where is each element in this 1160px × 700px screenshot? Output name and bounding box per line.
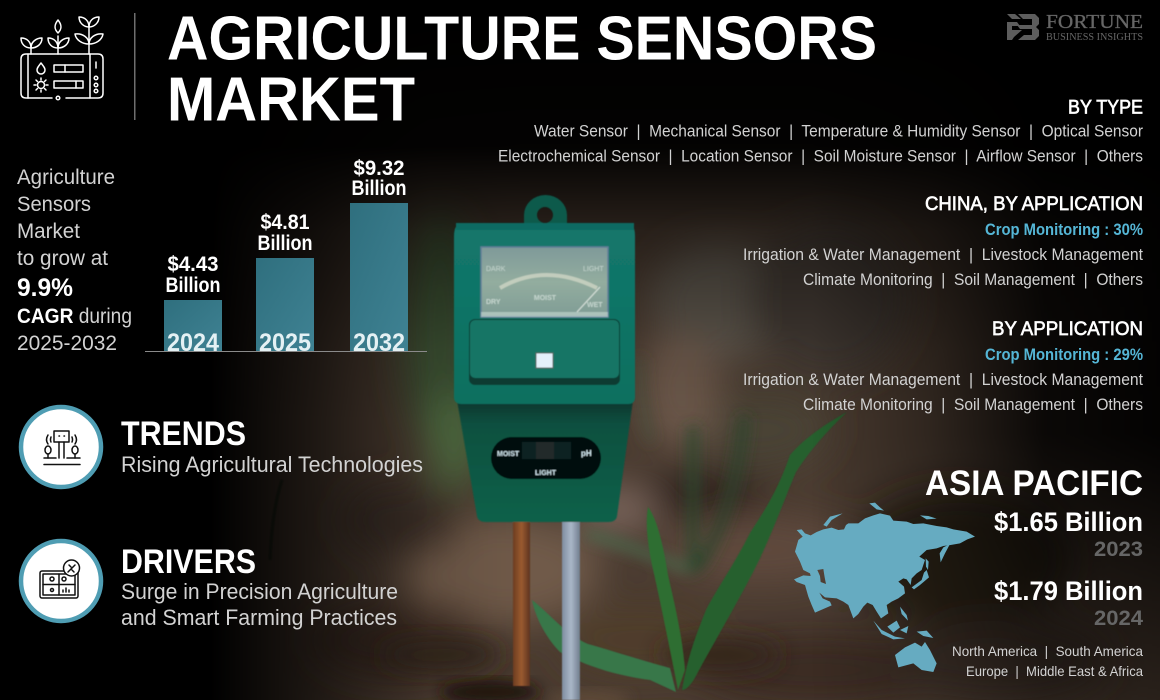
logo: Fortune Business Insights — [1007, 11, 1143, 43]
bar 2025 — [256, 211, 314, 357]
background out-of-focus leaves — [590, 360, 744, 570]
other regions: North America | South America — [952, 643, 1143, 659]
bar 2025: Billion — [258, 232, 312, 255]
drivers description: and Smart Farming Practices — [121, 605, 397, 630]
drivers block — [21, 541, 398, 630]
Asia Pacific figures: 2024 — [1094, 607, 1143, 630]
CAGR text block: CAGR during — [17, 305, 132, 328]
grass blades — [270, 412, 847, 692]
bar 2032 — [350, 157, 408, 357]
CAGR text block: 2025-2032 — [17, 332, 117, 355]
drivers heading: DRIVERS — [121, 543, 256, 581]
bar 2024 — [164, 253, 222, 357]
CAGR text block: Market — [17, 220, 80, 243]
China by application segment: CHINA, BY APPLICATION — [925, 193, 1143, 215]
by type segment: BY TYPE — [1068, 96, 1143, 118]
other regions — [952, 643, 1143, 679]
meter switch panel: MOIST — [497, 451, 520, 458]
meter white indicator — [536, 353, 553, 368]
Asia Pacific figures: ASIA PACIFIC — [925, 464, 1143, 503]
icon: smart farming tablet — [21, 541, 101, 621]
header icon: plants on a sensor panel — [21, 17, 103, 100]
title: MARKET — [167, 66, 415, 134]
logo: Fortune Business Insights: BUSINESS INSIGHTS — [1046, 31, 1143, 43]
bar 2024: 2024 — [167, 329, 219, 357]
CAGR text block: Agriculture — [17, 166, 115, 189]
by application segment: Crop Monitoring : 29% — [985, 346, 1143, 364]
CAGR text block — [17, 166, 132, 355]
meter display: MOIST — [534, 295, 557, 302]
Asia Pacific figures — [925, 464, 1143, 630]
meter switch panel: LIGHT — [535, 470, 557, 477]
bar 2032: 2032 — [353, 329, 405, 357]
bar 2032: Billion — [352, 177, 406, 200]
logo: Fortune Business Insights: FORTUNE — [1046, 11, 1143, 33]
meter switch panel: pH — [581, 449, 592, 458]
trends heading: TRENDS — [121, 415, 246, 453]
by application segment — [743, 318, 1143, 414]
drivers description: Surge in Precision Agriculture — [121, 579, 398, 604]
trends block — [21, 407, 423, 487]
icon: sensor in field — [21, 407, 101, 487]
Asia Pacific figures: $1.65 Billion — [994, 507, 1143, 537]
drivers description — [121, 579, 398, 630]
meter lower housing — [457, 400, 633, 522]
bar 2024: Billion — [166, 274, 220, 297]
CAGR text block: Sensors — [17, 193, 91, 216]
by type segment — [498, 96, 1143, 166]
title — [167, 4, 877, 134]
header divider — [134, 13, 136, 120]
Asia Pacific figures: 2023 — [1094, 538, 1143, 561]
meter display: LIGHT — [583, 266, 604, 273]
meter switch panel — [491, 437, 601, 479]
meter upper housing — [454, 223, 635, 404]
Asia Pacific figures: $1.79 Billion — [994, 576, 1143, 606]
soil sensor meter photo — [454, 195, 635, 700]
bar chart: market size — [145, 157, 427, 357]
by application segment: BY APPLICATION — [992, 318, 1143, 340]
meter probes — [513, 518, 580, 700]
meter hanging lug — [524, 195, 567, 226]
meter display: DRY — [486, 299, 501, 306]
map: Asia Pacific — [794, 503, 975, 672]
China by application segment: Crop Monitoring : 30% — [985, 221, 1143, 239]
bar 2032: $9.32 — [354, 157, 404, 180]
bar 2025: 2025 — [259, 329, 311, 357]
title: AGRICULTURE SENSORS — [167, 4, 877, 74]
meter display — [481, 247, 608, 317]
bar 2024: $4.43 — [168, 253, 218, 276]
China by application segment — [743, 193, 1143, 289]
other regions: Europe | Middle East & Africa — [966, 663, 1143, 679]
bar 2025: $4.81 — [260, 211, 310, 234]
soil clump — [380, 639, 780, 700]
CAGR text block: to grow at — [17, 247, 108, 270]
meter button block — [469, 319, 620, 385]
CAGR text block: 9.9% — [17, 274, 73, 302]
meter display: DARK — [486, 266, 506, 273]
meter display: WET — [587, 302, 603, 309]
trends description: Rising Agricultural Technologies — [121, 452, 423, 477]
